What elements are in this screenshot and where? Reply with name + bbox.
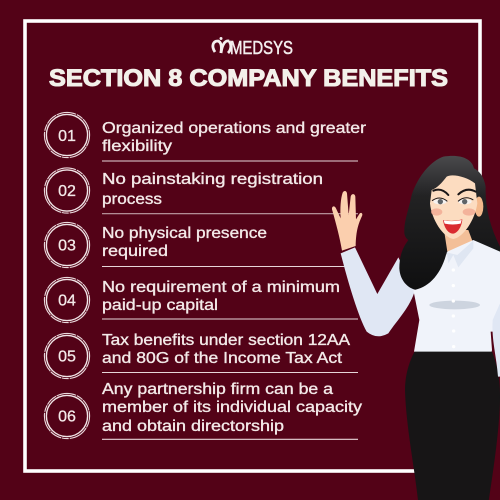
benefit 03 [44, 222, 358, 268]
benefit 01 [44, 112, 366, 161]
text 04: paid-up capital [102, 297, 218, 314]
text 06: Any partnership firm can be a [102, 381, 333, 398]
text 02: process [102, 191, 162, 208]
badge 03 [44, 222, 90, 268]
benefit 02 [44, 168, 358, 214]
logo wordmark: MEDSYS [230, 37, 293, 58]
badge 06: 06 [58, 408, 76, 426]
badge 01: 01 [58, 128, 76, 145]
eyebrows [433, 190, 476, 195]
badge 02 [44, 168, 90, 213]
benefit 05 [44, 332, 358, 379]
text 01: Organized operations and greater [102, 120, 366, 137]
blush [431, 208, 475, 216]
shirt [413, 240, 500, 352]
text 05: Tax benefits under section 12AA [102, 332, 351, 349]
text 06: and obtain directorship [102, 418, 284, 435]
text 03: No physical presence [102, 225, 267, 242]
face [430, 175, 477, 239]
neck [444, 230, 473, 255]
text 02: No painstaking registration [102, 171, 323, 188]
badge 04 [44, 277, 90, 323]
text 02 [102, 171, 323, 208]
benefit 04 [44, 277, 358, 323]
text 04 [102, 279, 340, 314]
benefit 06 [44, 381, 362, 439]
eyes [432, 198, 473, 204]
left sleeve [341, 247, 415, 336]
skirt [405, 351, 500, 500]
icon: logo mark [213, 37, 231, 53]
collar [447, 241, 473, 267]
logo [213, 37, 293, 58]
shirt buttons [452, 268, 455, 348]
text 06 [102, 381, 362, 435]
badge 02: 02 [58, 183, 76, 200]
badge 05: 05 [58, 348, 76, 366]
hand [332, 191, 362, 251]
text 04: No requirement of a minimum [102, 279, 340, 296]
illustration: waving woman [332, 156, 500, 500]
right sleeve [492, 303, 500, 377]
badge 03: 03 [58, 238, 76, 254]
text 01: flexibility [102, 138, 172, 155]
badge 04: 04 [58, 292, 76, 310]
text 06: member of its individual capacity [102, 399, 362, 416]
text 01 [102, 120, 366, 155]
ear [475, 197, 483, 217]
text 05 [102, 332, 351, 367]
text 03: required [102, 243, 168, 260]
badge 01 [44, 112, 90, 158]
badge 05 [44, 333, 90, 379]
mouth [443, 219, 462, 234]
hair [399, 156, 500, 290]
text 05: and 80G of the Income Tax Act [102, 350, 343, 367]
badge 06 [44, 393, 90, 439]
shirt shading [429, 301, 480, 309]
text 03 [102, 225, 267, 260]
title: SECTION 8 COMPANY BENEFITS [49, 65, 448, 92]
